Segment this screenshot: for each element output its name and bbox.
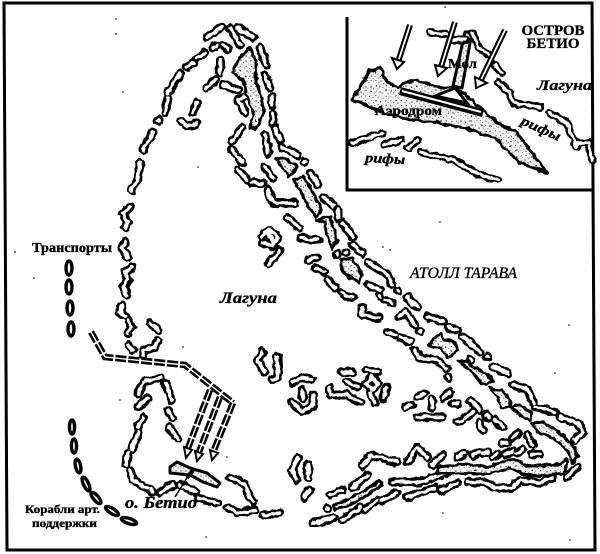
reefs: southern chain xyxy=(313,447,552,523)
label: Betio: о. Бетио xyxy=(125,493,197,512)
support ships xyxy=(69,420,137,526)
inset frame xyxy=(347,17,594,190)
stippled islands of the atoll xyxy=(232,48,578,510)
label: transports: Транспорты xyxy=(32,241,112,256)
reefs: northern arc of the atoll xyxy=(120,27,253,355)
transport ships xyxy=(66,261,74,336)
label: inset lagoon: Лагуна xyxy=(536,78,593,94)
reefs: eastern inner chain xyxy=(337,252,471,378)
inset title second line: БЕТИО xyxy=(526,36,580,52)
reefs: lagoon patches xyxy=(258,352,540,497)
inset: Betio island xyxy=(352,32,547,173)
assault route with landing arrows xyxy=(91,332,233,461)
label: atoll name: АТОЛЛ ТАРАВА xyxy=(409,265,517,282)
inset: attack arrows xyxy=(392,22,505,88)
label: reefs upper: рифы xyxy=(517,113,563,145)
label: reefs lower: рифы xyxy=(364,151,406,168)
inset title: ОСТРОВ xyxy=(522,23,585,39)
label: mole: Мол xyxy=(448,57,477,72)
label: airfield: Аэродром xyxy=(375,104,442,119)
reefs: northern inner islets xyxy=(180,60,353,297)
reefs: eastern outer chain xyxy=(260,48,583,477)
label: lagoon: Лагуна xyxy=(219,290,277,307)
reefs: ring around Betio xyxy=(126,378,280,515)
label: support ships line two: поддержки xyxy=(32,516,97,530)
Betio island xyxy=(170,462,220,497)
label: support ships line one: Корабли арт. xyxy=(25,502,100,516)
inset: reefs xyxy=(352,32,592,180)
